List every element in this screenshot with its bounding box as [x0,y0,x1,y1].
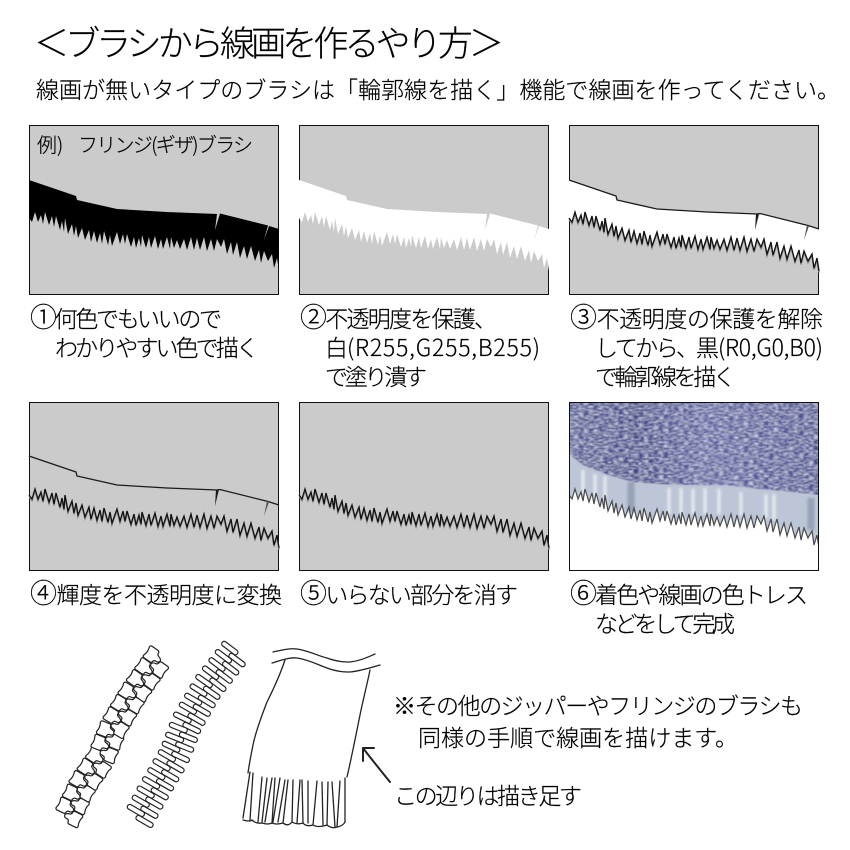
panel background [570,402,818,570]
fringe shape in white [299,180,549,271]
panel frame [570,402,818,570]
caption: step 4: ④輝度を不透明度に変換 [30,572,282,611]
panel background [570,126,818,294]
caption: step 3: (R0,G0,B0) [718,329,823,363]
caption: step 6 [570,572,808,639]
panel background [300,126,548,294]
subtitle: 線画が無いタイプのブラシは「輪郭線を描く」機能で線画を作ってください。 [36,71,840,105]
panel background [300,402,548,570]
panel: step 4 luminance to opacity [29,402,279,570]
panel: step 6 coloured denim [569,402,819,570]
panel: step 2 white fill [299,126,549,294]
panel: step 3 outline on white [569,126,819,294]
fringe line [569,489,819,548]
denim texture [569,402,819,495]
caption: step 1: わかりやすい色で描く [55,329,259,363]
fringe shape in black [29,180,279,271]
arrow pointing to scarf [363,748,390,782]
panel: step 5 erase unneeded [299,402,549,570]
example label: フリンジ(ギザ)ブラシ [78,129,253,158]
caption: step 2: ②不透明度を保護、 [300,296,497,335]
caption: step 3: してから、 [595,329,699,363]
caption: step 6: などをして完成 [595,605,735,639]
illustration: scarf with fringe [243,649,380,828]
note text: 同様の手順で線画を描けます。 [418,719,738,753]
caption: step 2 [300,296,540,392]
white fringe with outline [569,180,819,272]
illustration: rung zipper brush [124,640,249,828]
pale fringe colour [569,402,819,548]
caption: step 1 [30,296,259,363]
caption: step 3: 黒 [696,329,719,363]
note text: ※その他のジッパーやフリンジのブラシも [393,687,803,721]
panel background [30,126,278,294]
annotation text: この辺りは描き足す [394,777,582,811]
panel: step 1 black brush [29,126,279,294]
illustration: puzzle zipper brush [52,645,173,828]
caption: step 2: 白 [325,329,348,363]
example label: 例) [37,129,63,158]
caption: step 3 [570,296,823,392]
caption: step 5: ⑤いらない部分を消す [300,572,518,611]
caption: step 3: で輪郭線を描く [595,358,736,392]
note text [393,687,803,753]
fringe line only [299,489,549,550]
caption: step 2: (R255,G255,B255) [347,329,540,363]
outline only [29,456,279,550]
caption: step 2: で塗り潰す [325,358,427,392]
caption: step 1: ①何色でもいいので [30,296,222,335]
title: ＜ブラシから線画を作るやり方＞ [34,16,504,67]
panel background [30,402,278,570]
caption: step 3: ③不透明度の保護を解除 [570,296,823,335]
caption: step 6: ⑥着色や線画の色トレス [570,572,808,611]
